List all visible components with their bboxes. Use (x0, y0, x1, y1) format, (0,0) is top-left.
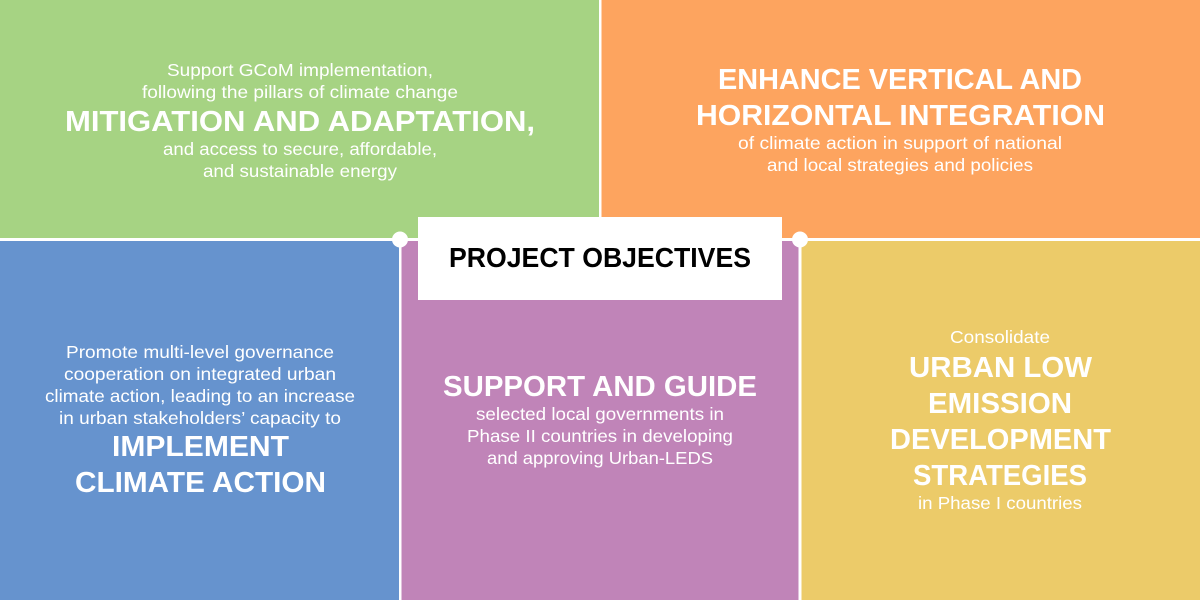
title box (418, 217, 782, 300)
text: phase I countries: in Phase I countries (918, 493, 1082, 513)
heading: implement climate action: CLIMATE ACTION (75, 467, 326, 499)
heading: implement climate action: IMPLEMENT (112, 431, 290, 463)
text: mitigation intro (142, 60, 458, 102)
heading: enhance integration (696, 64, 1105, 132)
heading: urban low emission development strategies: URBAN LOW (909, 352, 1092, 384)
heading: implement climate action (75, 431, 326, 499)
heading: enhance integration: ENHANCE VERTICAL AND (718, 64, 1082, 96)
text: integration detail: and local strategies and policies (767, 155, 1033, 175)
heading: urban low emission development strategies (890, 352, 1112, 492)
text: mitigation intro: following the pillars of climate change (142, 82, 458, 102)
panel: implement climate action (0, 241, 399, 600)
heading: urban low emission development strategies: EMISSION (928, 388, 1072, 420)
heading: enhance integration: HORIZONTAL INTEGRATION (696, 100, 1105, 132)
heading: urban low emission development strategies: STRATEGIES (913, 460, 1087, 492)
text: integration detail: of climate action in support of national (738, 133, 1062, 153)
text: consolidate: Consolidate (950, 327, 1050, 347)
text: governance cooperation: cooperation on integrated urban (64, 364, 336, 384)
panel: support and guide (402, 241, 798, 600)
heading: urban low emission development strategies: DEVELOPMENT (890, 424, 1112, 456)
panel: mitigation and adaptation (0, 0, 599, 238)
heading: mitigation and adaptation: MITIGATION AND ADAPTATION, (65, 106, 535, 138)
text: local governments: and approving Urban-LEDS (487, 448, 713, 468)
text: mitigation intro: Support GCoM implementation, (167, 60, 433, 80)
text: mitigation outro: and sustainable energy (203, 161, 397, 181)
panel: vertical and horizontal integration (602, 0, 1200, 238)
connector dot: right (792, 232, 808, 248)
text: mitigation outro (163, 139, 437, 181)
text: governance cooperation: in urban stakeholders’ capacity to (59, 408, 341, 428)
text: integration detail (738, 133, 1062, 175)
text: governance cooperation: climate action, leading to an increase (45, 386, 355, 406)
title: PROJECT OBJECTIVES (449, 242, 751, 273)
text: local governments: selected local governments in (476, 404, 724, 424)
text: governance cooperation (45, 342, 355, 428)
text: local governments: Phase II countries in developing (467, 426, 733, 446)
text: mitigation outro: and access to secure, affordable, (163, 139, 437, 159)
text: governance cooperation: Promote multi-level governance (66, 342, 334, 362)
panel: urban low emission development strategies (802, 241, 1200, 600)
heading: support and guide: SUPPORT AND GUIDE (443, 371, 757, 403)
connector dot: left (392, 232, 408, 248)
text: local governments (467, 404, 733, 468)
